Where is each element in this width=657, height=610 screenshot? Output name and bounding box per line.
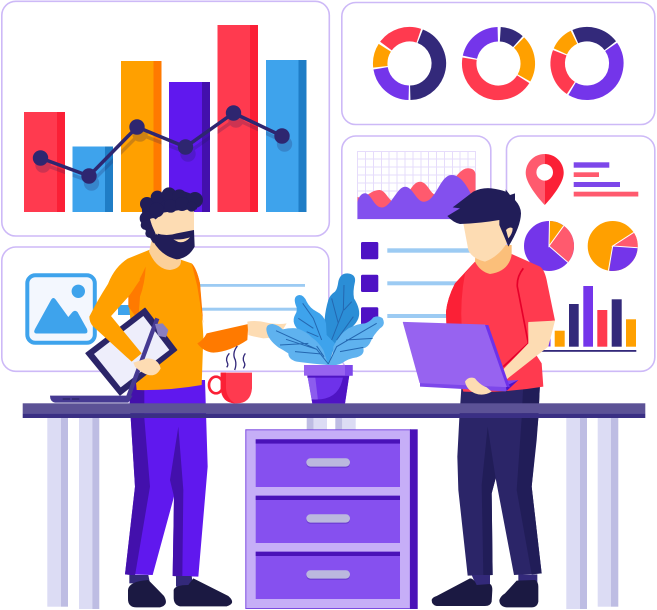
panel: bar and line chart (2, 1, 329, 236)
leaf front right (328, 316, 384, 365)
leaf veins (276, 285, 377, 364)
leaf back centre (324, 273, 359, 365)
icon: map pin (526, 154, 564, 205)
donut 1 (369, 23, 450, 104)
right man legs (432, 383, 542, 607)
table back legs (307, 418, 356, 430)
right man hair (447, 188, 521, 247)
grid (358, 152, 476, 219)
left man head (140, 187, 203, 259)
pie 2 (595, 229, 638, 271)
man on right (403, 188, 555, 607)
horizontal bars (574, 162, 638, 196)
right man neck and face (475, 245, 512, 274)
cabinet (246, 429, 418, 609)
line chart (33, 105, 290, 184)
right man shirt (446, 254, 555, 392)
list (361, 242, 471, 325)
panel: donut charts (342, 2, 655, 124)
panel: area chart and list (342, 136, 491, 371)
drawer 1 (256, 439, 400, 487)
line chart shadow (35, 112, 292, 191)
icon: picture (27, 275, 95, 343)
hair (140, 187, 203, 243)
donut 3 (546, 23, 628, 104)
plant (266, 273, 384, 403)
right man hand (465, 378, 492, 395)
leaf front left (266, 324, 328, 365)
bar chart (24, 25, 306, 212)
donut 2 (457, 22, 540, 105)
table top (23, 403, 645, 418)
right man arm (503, 321, 555, 379)
left man legs (125, 380, 232, 607)
left man arm and laptop (50, 258, 168, 403)
table legs (47, 418, 618, 609)
beard (153, 230, 195, 259)
area chart (358, 168, 476, 219)
pot (304, 365, 353, 403)
laptop (403, 322, 518, 391)
text lines (118, 284, 305, 315)
column chart (530, 286, 636, 352)
panel: location and pies (506, 136, 655, 371)
leaf back left (294, 295, 335, 365)
panel: image placeholder and lines (2, 247, 329, 371)
drawer 2 (256, 496, 400, 543)
left man clipboard (86, 308, 177, 395)
left man torso (108, 240, 287, 390)
coffee cup (209, 346, 252, 403)
man on left (50, 187, 287, 607)
pie 1 (532, 221, 568, 263)
drawer 3 (256, 552, 400, 599)
steam (227, 346, 245, 370)
